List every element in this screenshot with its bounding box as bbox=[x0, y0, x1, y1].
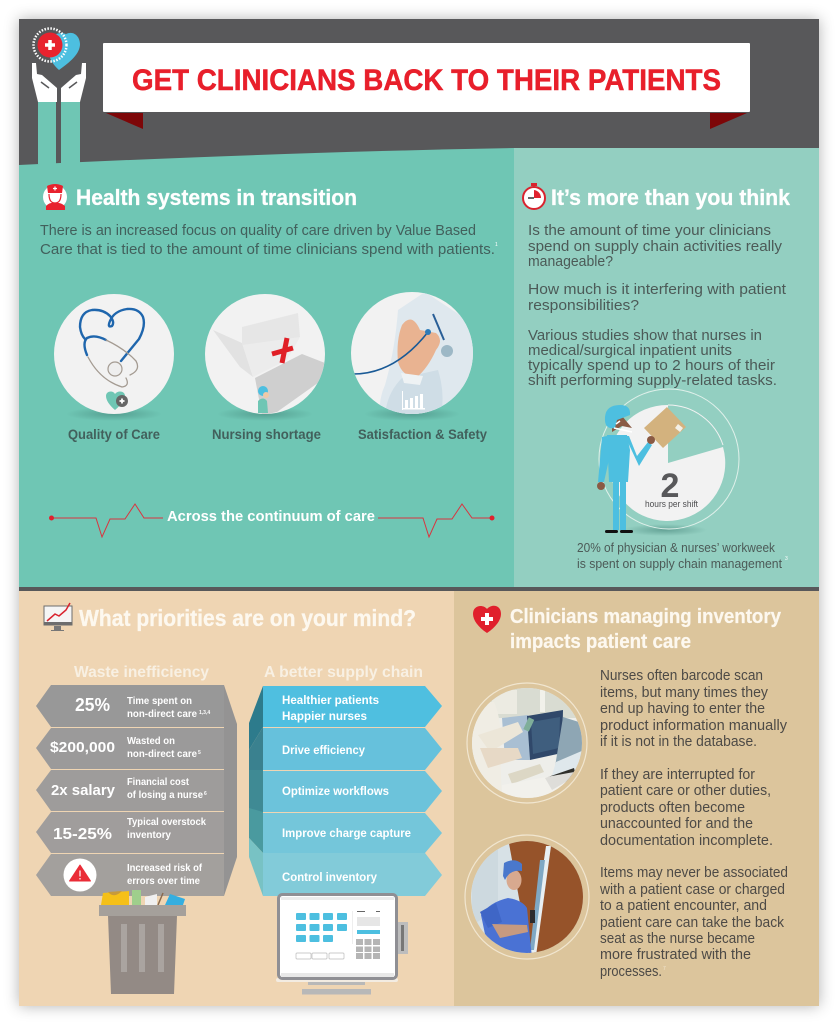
body text: processes. bbox=[600, 964, 662, 980]
row: risk of errors: Increased risk of bbox=[127, 862, 202, 874]
body text: unaccounted for and the bbox=[600, 816, 753, 832]
row: risk of errors bbox=[36, 854, 224, 896]
icon: nurse figure bbox=[597, 405, 655, 533]
row: 2x salary: Financial cost bbox=[127, 776, 189, 788]
row: risk of errors: errors over time bbox=[127, 875, 200, 887]
body text: Items may never be associated bbox=[600, 865, 788, 881]
body text: documentation incomplete. bbox=[600, 833, 773, 849]
icon: monitor chart bbox=[44, 603, 72, 631]
intro text: Care that is tied to the amount of time clinicians spend with patients. bbox=[40, 242, 495, 258]
row: 15-25% bbox=[36, 812, 224, 853]
body text: product information manually bbox=[600, 718, 788, 734]
body text: responsibilities? bbox=[528, 298, 639, 314]
intro text: 1 bbox=[495, 242, 498, 248]
row: control inventory bbox=[263, 853, 442, 896]
chart: 2 hours pie bbox=[599, 389, 739, 536]
heartbeat line right bbox=[378, 504, 494, 537]
sleeves bbox=[38, 102, 80, 164]
heading: more than you think: It’s more than you think bbox=[551, 185, 790, 210]
body text: with a patient case or charged bbox=[599, 882, 785, 898]
banner ribbon left bbox=[106, 113, 143, 129]
icon: red cross bbox=[272, 338, 293, 363]
gray stack side bbox=[224, 685, 237, 896]
row: 15-25%: 15-25% bbox=[53, 826, 112, 843]
heading: clinicians: Clinicians managing inventory bbox=[510, 606, 782, 628]
caption: 20% of physician & nurses’ workweek bbox=[577, 540, 775, 555]
icon: tiny nurse bbox=[258, 386, 269, 413]
banner ribbon right bbox=[710, 113, 747, 129]
row: 15-25%: inventory bbox=[127, 829, 171, 841]
row: 25% bbox=[36, 685, 224, 727]
body text bbox=[599, 668, 788, 980]
number 2: 2 bbox=[661, 467, 679, 505]
icon: nurse bbox=[43, 184, 67, 210]
body text: Nurses often barcode scan bbox=[600, 668, 763, 684]
row: optimize workflows bbox=[263, 771, 442, 812]
body text: 7 bbox=[663, 966, 666, 972]
photo: nurse at cabinet bbox=[465, 835, 590, 959]
row: improve charge capture: Improve charge capture bbox=[282, 826, 411, 840]
body text: end up having to enter the bbox=[600, 701, 765, 717]
row: $200,000: Wasted on bbox=[127, 735, 175, 747]
header artwork: hands and heart bbox=[32, 28, 86, 164]
body text: typically spend up to 2 hours of their bbox=[528, 358, 775, 374]
item: nursing shortage bbox=[205, 294, 325, 421]
label: nursing shortage: Nursing shortage bbox=[212, 427, 321, 442]
body text: more frustrated with the bbox=[600, 947, 751, 963]
header band bbox=[19, 19, 819, 169]
icon: box bbox=[644, 407, 686, 448]
row: 2x salary bbox=[36, 770, 224, 811]
body text: if it is not in the database. bbox=[600, 734, 757, 750]
caption bbox=[577, 540, 788, 571]
panel: health systems in transition bbox=[19, 148, 514, 588]
icon: bar chart bbox=[402, 391, 425, 410]
intro text bbox=[40, 223, 498, 258]
row: healthier patients: Happier nurses bbox=[282, 711, 367, 723]
heading: clinicians bbox=[510, 606, 782, 653]
body text: How much is it interfering with patient bbox=[528, 282, 786, 298]
label: satisfaction and safety: Satisfaction & Safety bbox=[358, 427, 487, 442]
panel: priorities bbox=[19, 588, 454, 1006]
row: 25%: 25% bbox=[75, 695, 110, 715]
row: $200,000 bbox=[36, 728, 224, 769]
panel: clinicians managing inventory bbox=[454, 588, 819, 1006]
section divider bbox=[19, 587, 819, 591]
item: satisfaction and safety bbox=[351, 292, 475, 421]
icon: small heart bbox=[106, 392, 128, 410]
heading: health systems: Health systems in transition bbox=[76, 185, 357, 210]
panel: more than you think bbox=[514, 148, 819, 588]
intro text: There is an increased focus on quality of care driven by Value Based bbox=[40, 223, 476, 239]
body text: to a patient encounter, and bbox=[600, 898, 767, 914]
continuum text: Across the continuum of care bbox=[167, 508, 375, 525]
hours per shift: hours per shift bbox=[645, 499, 698, 509]
row: 15-25%: Typical overstock bbox=[127, 816, 206, 828]
caption: 3 bbox=[785, 556, 788, 562]
row: 2x salary: 6 bbox=[204, 791, 207, 797]
row: optimize workflows: Optimize workflows bbox=[282, 784, 389, 798]
trash can bbox=[99, 890, 186, 994]
heartbeat line left bbox=[49, 504, 163, 537]
blue stack side bbox=[249, 686, 263, 896]
body text: items, but many times they bbox=[600, 685, 769, 701]
row: $200,000: 5 bbox=[198, 750, 201, 756]
touchscreen terminal bbox=[276, 894, 408, 994]
subheading: waste: Waste inefficiency bbox=[74, 664, 209, 681]
body text: patient care can take the back bbox=[600, 915, 785, 931]
body text: medical/surgical inpatient units bbox=[528, 343, 732, 359]
item: quality of care bbox=[54, 294, 174, 421]
title: GET CLINICIANS BACK TO THEIR PATIENTS bbox=[132, 64, 721, 97]
icon: blue heart bbox=[48, 33, 80, 70]
heading: priorities: What priorities are on your mind? bbox=[79, 605, 416, 631]
heading: clinicians: impacts patient care bbox=[510, 631, 691, 653]
body text: If they are interrupted for bbox=[600, 767, 755, 783]
title banner bbox=[103, 43, 750, 112]
row: drive efficiency: Drive efficiency bbox=[282, 743, 365, 757]
icon: stopwatch bbox=[523, 183, 545, 209]
body text bbox=[528, 223, 786, 389]
row: 25%: Time spent on bbox=[127, 695, 192, 707]
icon: hands bbox=[32, 63, 86, 102]
row: control inventory: Control inventory bbox=[282, 870, 377, 884]
body text: seat as the nurse became bbox=[600, 931, 755, 947]
body text: products often become bbox=[600, 800, 745, 816]
caption: is spent on supply chain management bbox=[577, 556, 782, 571]
row: healthier patients: Healthier patients bbox=[282, 695, 379, 707]
body text: Is the amount of time your clinicians bbox=[528, 223, 771, 239]
row: $200,000: non-direct care bbox=[127, 748, 197, 760]
body text: shift performing supply-related tasks. bbox=[528, 373, 777, 389]
icon: heart cross bbox=[473, 606, 501, 633]
body text: Various studies show that nurses in bbox=[528, 328, 762, 344]
label: quality of care: Quality of Care bbox=[68, 427, 160, 442]
row: healthier patients bbox=[263, 686, 442, 727]
row: 2x salary: 2x salary bbox=[51, 782, 116, 799]
body text: spend on supply chain activities really bbox=[528, 239, 783, 255]
icon: stethoscope heart bbox=[80, 309, 144, 387]
subheading: better supply chain: A better supply chain bbox=[264, 664, 423, 681]
row: $200,000: $200,000 bbox=[50, 739, 115, 756]
body text: manageable? bbox=[528, 254, 613, 270]
icon: red medical badge bbox=[34, 28, 66, 62]
photo: barcode scanning bbox=[467, 683, 587, 805]
row: drive efficiency bbox=[263, 728, 442, 770]
row: 25%: non-direct care bbox=[127, 708, 197, 720]
row: improve charge capture bbox=[263, 813, 442, 853]
row: 25%: 1,3,4 bbox=[199, 710, 210, 716]
row: 2x salary: of losing a nurse bbox=[127, 789, 203, 801]
body text: patient care or other duties, bbox=[600, 783, 771, 799]
